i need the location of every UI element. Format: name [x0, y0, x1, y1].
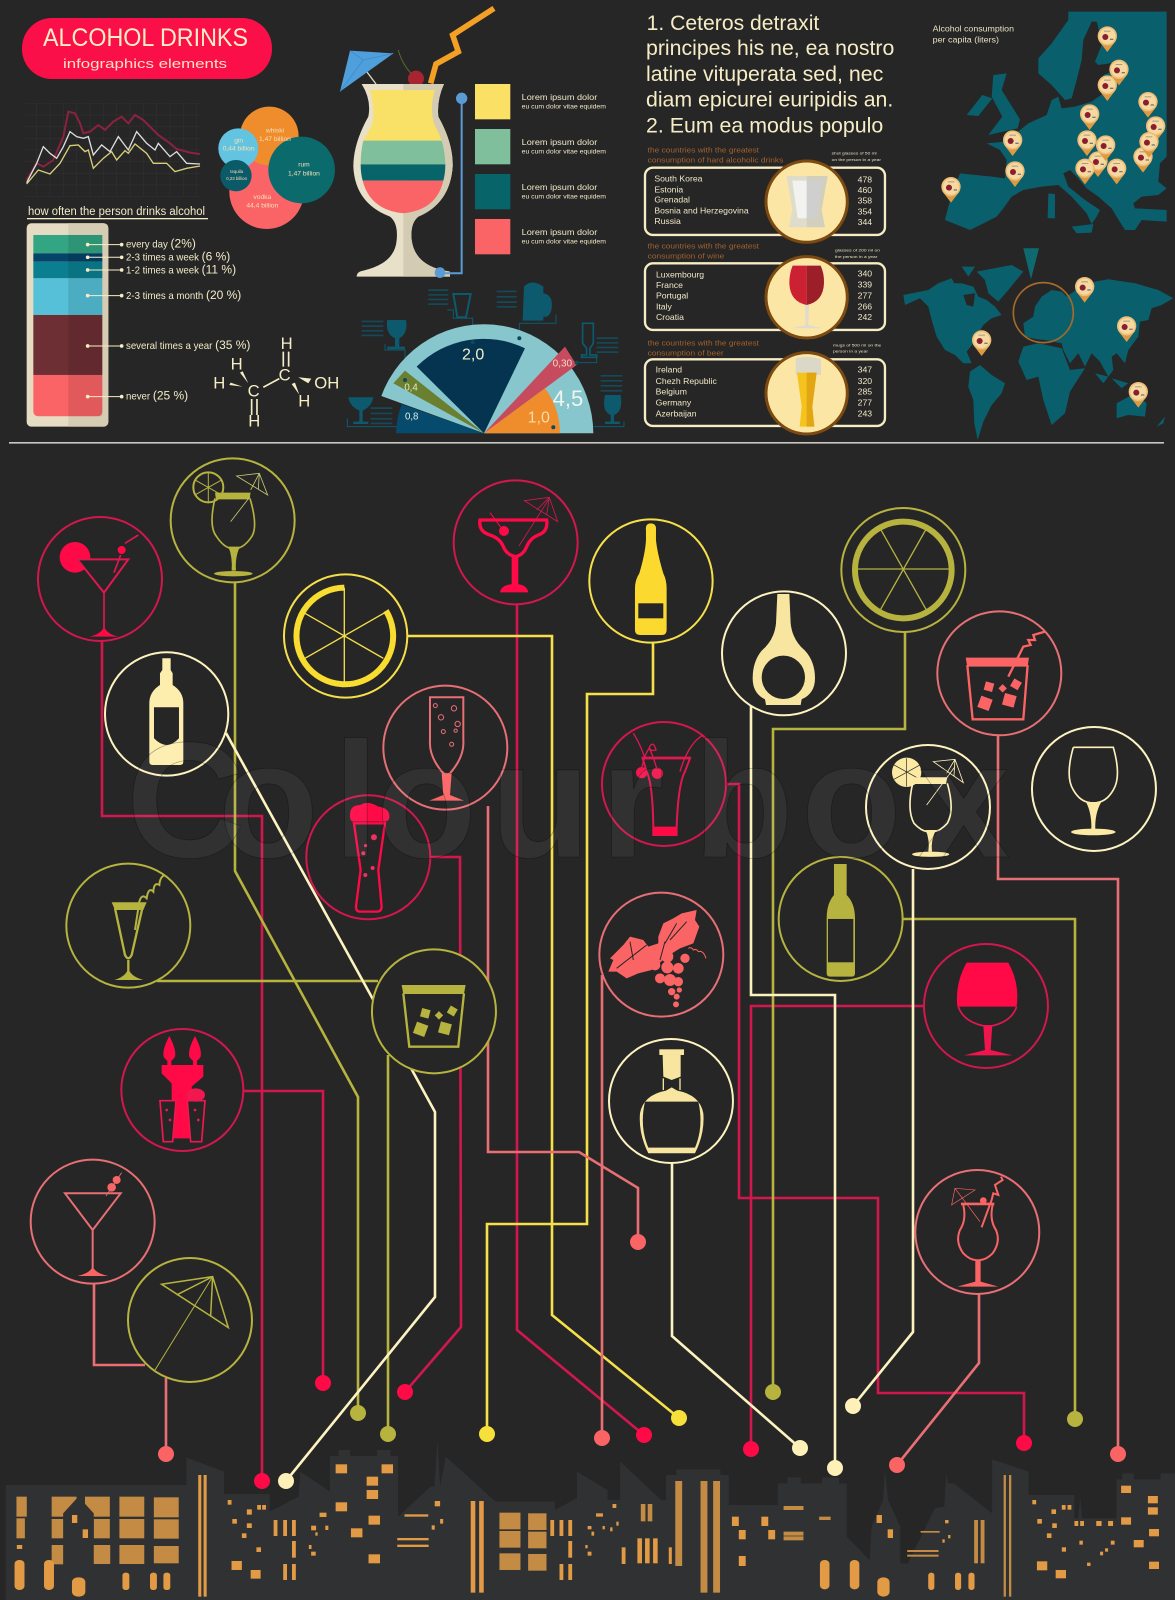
panel: wine ranking [645, 241, 885, 338]
bubble chart: spirits: gin [234, 137, 243, 144]
panel: wine ranking: the person in a year [835, 254, 878, 259]
panel: wine ranking: consumption of wine [648, 252, 724, 261]
panel: hard alcohol ranking [645, 145, 885, 242]
icon: lemon slice yellow [284, 574, 407, 698]
panel: wine ranking: 242 [858, 312, 872, 322]
bubble chart: spirits: vodka [253, 194, 271, 201]
icon: cherry glass [602, 722, 726, 846]
panel: wine ranking: Croatia [656, 312, 684, 322]
fan chart: drinks: 0,30 [553, 359, 573, 370]
bubble chart: spirits [218, 107, 335, 229]
cocktail legend [435, 84, 606, 278]
molecule: ethanol [213, 334, 339, 431]
panel: beer ranking: 320 [858, 376, 872, 386]
panel: wine ranking: 277 [858, 290, 872, 300]
cocktail legend: Lorem ipsum dolor [522, 182, 597, 192]
text block: numbered list [646, 11, 894, 138]
map: world [903, 265, 1173, 440]
cocktail legend: eu cum dolor vitae equidem [522, 148, 606, 155]
icon: hurricane cocktail [915, 1170, 1039, 1294]
bubble chart: spirits: 0,23 billion [226, 176, 248, 181]
molecule: ethanol: C [248, 382, 260, 401]
cocktail legend: eu cum dolor vitae equidem [522, 103, 606, 110]
icon: old fashioned glass with ice [372, 949, 496, 1073]
frequency glass chart: 1-2 times a week (11 %) [126, 262, 236, 276]
text block: numbered list: principes his ne, ea nostro [646, 36, 894, 60]
panel: wine ranking: the countries with the greatest [648, 241, 760, 250]
panel: wine ranking: 266 [858, 301, 872, 311]
molecule: ethanol: C [279, 366, 291, 385]
icon: champagne bottle [589, 519, 713, 643]
panel: wine ranking: France [656, 280, 683, 290]
bubble chart: spirits: 0,44 billion [223, 146, 255, 153]
panel: beer ranking [645, 338, 885, 434]
icon: cocktail with citrus [866, 745, 990, 869]
connector lines and end dots [94, 582, 1126, 1489]
frequency glass chart: 2-3 times a week (6 %) [126, 250, 230, 264]
text block: numbered list: 2. Eum ea modus populo [646, 114, 883, 138]
frequency glass chart [27, 223, 250, 427]
title pill [22, 18, 272, 79]
bubble chart: spirits: tequila [230, 169, 244, 174]
icon: round flask bottle [722, 591, 846, 715]
icon: wine glass [1032, 727, 1156, 851]
panel: hard alcohol ranking: Bosnia and Herzegovina [654, 205, 749, 215]
bubble chart: spirits: rum [298, 162, 310, 169]
panel: beer ranking: mugs of 500 ml on the [833, 343, 882, 348]
cocktail legend: eu cum dolor vitae equidem [522, 238, 606, 245]
panel: beer ranking: 347 [858, 365, 872, 375]
panel: wine ranking: 340 [858, 269, 872, 279]
map title: Alcohol consumption [933, 24, 1014, 34]
map title [933, 24, 1014, 44]
cocktail legend: Lorem ipsum dolor [522, 92, 597, 102]
icon: glass with ice and straw [937, 611, 1061, 735]
icon: martini with lemon [38, 517, 162, 641]
text block: numbered list: diam epicurei euripidis an. [646, 88, 893, 112]
panel: beer ranking: person in a year [833, 349, 869, 354]
panel: beer ranking: Belgium [656, 387, 687, 397]
bubble chart: spirits: 1,47 billion [259, 136, 291, 143]
map pointer and zoom ring [1013, 248, 1073, 343]
panel: hard alcohol ranking: 354 [858, 206, 872, 216]
panel: wine ranking: Italy [656, 301, 673, 311]
frequency glass chart: 2-3 times a month (20 %) [126, 288, 241, 302]
panel: wine ranking: 339 [858, 279, 872, 289]
map title: per capita (liters) [933, 34, 999, 44]
fan chart: drinks: 2,0 [462, 346, 484, 363]
panel: hard alcohol ranking: 344 [858, 217, 872, 227]
panel: beer ranking: Ireland [656, 365, 682, 375]
panel: wine ranking: Luxembourg [656, 269, 704, 279]
icon: cognac bottle [609, 1039, 733, 1163]
icon: martini with olives [31, 1160, 155, 1284]
title pill: infographics elements [63, 56, 228, 71]
panel: hard alcohol ranking: consumption of hard alcoholic drinks [648, 156, 784, 165]
cocktail glass illustration [340, 8, 494, 277]
icon: margarita with umbrella [454, 480, 578, 604]
molecule: ethanol: OH [314, 373, 339, 392]
icon: olive cocktail with lime and umbrella [171, 458, 295, 582]
panel: hard alcohol ranking: shot glasses of 50 ml [832, 150, 877, 155]
panel: beer ranking: Germany [656, 398, 692, 408]
panel: hard alcohol ranking: 478 [858, 174, 872, 184]
icon: olive bottle [779, 857, 903, 981]
panel: beer ranking: 285 [858, 387, 872, 397]
panel: hard alcohol ranking: 460 [858, 185, 872, 195]
panel: hard alcohol ranking: South Korea [654, 174, 703, 184]
cocktail legend: Lorem ipsum dolor [522, 227, 597, 237]
fan chart: drinks: 0,8 [405, 411, 418, 422]
fan chart: drinks: 1,0 [528, 410, 550, 427]
heading: drinking frequency: how often the person drinks alcohol [28, 206, 205, 218]
map: Europe [933, 12, 1167, 233]
molecule: ethanol: H [213, 373, 225, 392]
text block: numbered list: 1. Ceteros detraxit [647, 11, 819, 35]
icon: beer taps [121, 1029, 243, 1151]
panel: beer ranking: Chezh Republic [656, 376, 717, 386]
molecule: ethanol: H [281, 334, 293, 353]
panel: beer ranking: 277 [858, 398, 872, 408]
title pill: ALCOHOL DRINKS [43, 24, 248, 52]
molecule: ethanol: H [248, 412, 260, 431]
panel: hard alcohol ranking: Estonia [654, 184, 683, 194]
molecule: ethanol: H [231, 354, 243, 373]
fan chart: drinks: 4,5 [553, 386, 583, 411]
panel: hard alcohol ranking: Grenadal [654, 195, 690, 205]
panel: hard alcohol ranking: the countries with the greatest [648, 145, 760, 154]
panel: beer ranking: consumption of beer [648, 348, 724, 357]
panel: hard alcohol ranking: on the person in a year [832, 157, 882, 162]
panel: beer ranking: Azerbaijan [656, 409, 697, 419]
fan chart: drinks: 0,4 [404, 383, 418, 394]
city skyline left [6, 1440, 595, 1600]
map pins [941, 26, 1165, 408]
bubble chart: spirits: 44,4 billion [246, 203, 279, 210]
text block: numbered list: latine vituperata sed, nec [646, 62, 884, 86]
molecule: ethanol: H [298, 392, 310, 411]
frequency glass chart: never (25 %) [126, 388, 188, 402]
icon: champagne flute [383, 686, 507, 810]
icon: cream bottle [105, 652, 228, 776]
fan chart: drinks [347, 282, 624, 433]
line chart [25, 103, 202, 197]
watermark: Colourbox [126, 708, 1010, 892]
icon: lime slice [841, 508, 965, 632]
frequency glass chart: several times a year (35 %) [126, 338, 250, 352]
bubble chart: spirits: 1,47 billion [288, 171, 320, 178]
cocktail legend: eu cum dolor vitae equidem [522, 193, 606, 200]
panel: wine ranking: Portugal [656, 290, 688, 300]
icon: beer glass [306, 795, 430, 919]
bubble chart: spirits: whiski [265, 127, 285, 134]
icon: glass with spiral straw [66, 864, 190, 988]
icon: cocktail umbrella [128, 1258, 252, 1382]
panel: hard alcohol ranking: Russia [654, 216, 681, 226]
panel: hard alcohol ranking: 358 [858, 196, 872, 206]
panel: beer ranking: 243 [858, 409, 872, 419]
frequency glass chart: every day (2%) [126, 237, 196, 251]
icon: grape branch [599, 893, 723, 1017]
icon: brandy snifter [924, 944, 1048, 1068]
panel: beer ranking: the countries with the greatest [648, 338, 760, 347]
city skyline right [577, 1459, 1175, 1600]
panel: wine ranking: glasses of 200 ml on [835, 248, 880, 253]
cocktail legend: Lorem ipsum dolor [522, 137, 597, 147]
